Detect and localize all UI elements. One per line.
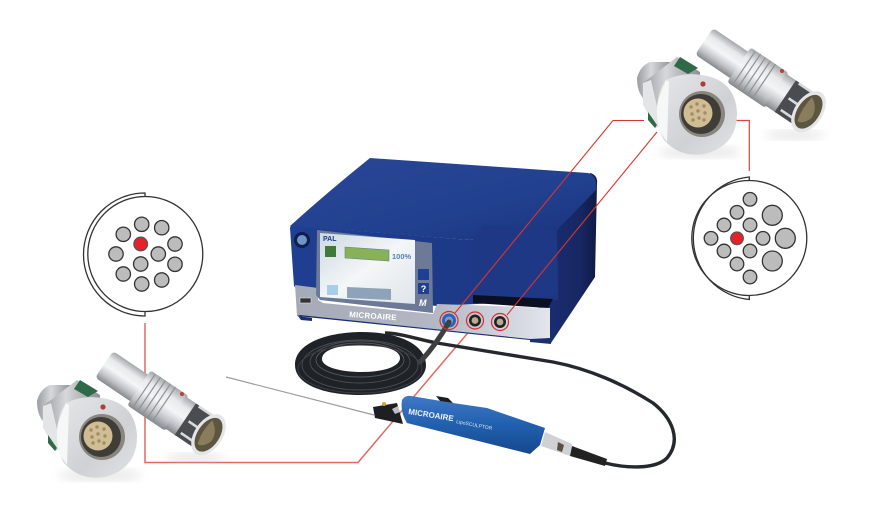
port 1 xyxy=(442,314,456,328)
right connector pair xyxy=(637,22,833,158)
help button xyxy=(418,283,429,294)
handpiece nozzle xyxy=(541,432,572,456)
strain relief xyxy=(570,446,607,466)
cannula needle xyxy=(226,377,374,415)
handpiece model: LipoSCULPTOR xyxy=(456,419,493,432)
right pinout diagram xyxy=(692,177,807,300)
M logo: M xyxy=(419,298,427,308)
left pinout diagram xyxy=(83,193,203,316)
port 2 xyxy=(469,314,481,326)
handpiece brand: MICROAIRE xyxy=(408,407,455,423)
port 3 xyxy=(494,316,506,328)
red line: left pinout to plug xyxy=(145,323,472,462)
touch screen xyxy=(320,233,415,304)
silver strip xyxy=(295,285,550,340)
console side xyxy=(530,173,597,343)
handpiece head xyxy=(373,403,403,424)
power button xyxy=(294,232,310,248)
storage door xyxy=(472,225,558,297)
strain relief of console cable xyxy=(420,322,449,362)
left connector pair xyxy=(37,345,233,481)
handpiece xyxy=(373,396,607,466)
screen status icon xyxy=(325,246,336,257)
port highlight rings xyxy=(440,312,508,330)
console foot xyxy=(298,316,312,321)
power level bar xyxy=(345,247,389,261)
help button: ? xyxy=(421,284,426,294)
control console xyxy=(290,158,597,344)
screen lower button xyxy=(327,285,338,295)
PAL logo: PAL xyxy=(323,236,337,243)
red lines: right side xyxy=(455,120,749,315)
console top xyxy=(290,158,596,240)
wrench button xyxy=(418,269,429,280)
long cable to handpiece xyxy=(385,333,674,467)
console brand: MICROAIRE xyxy=(349,310,397,322)
usb port xyxy=(300,298,311,303)
console front xyxy=(290,226,558,306)
handpiece body xyxy=(402,396,545,454)
coiled cable xyxy=(295,332,426,395)
screen lower field xyxy=(347,287,391,300)
screen bezel xyxy=(316,230,433,313)
power percent: 100% xyxy=(392,252,412,261)
